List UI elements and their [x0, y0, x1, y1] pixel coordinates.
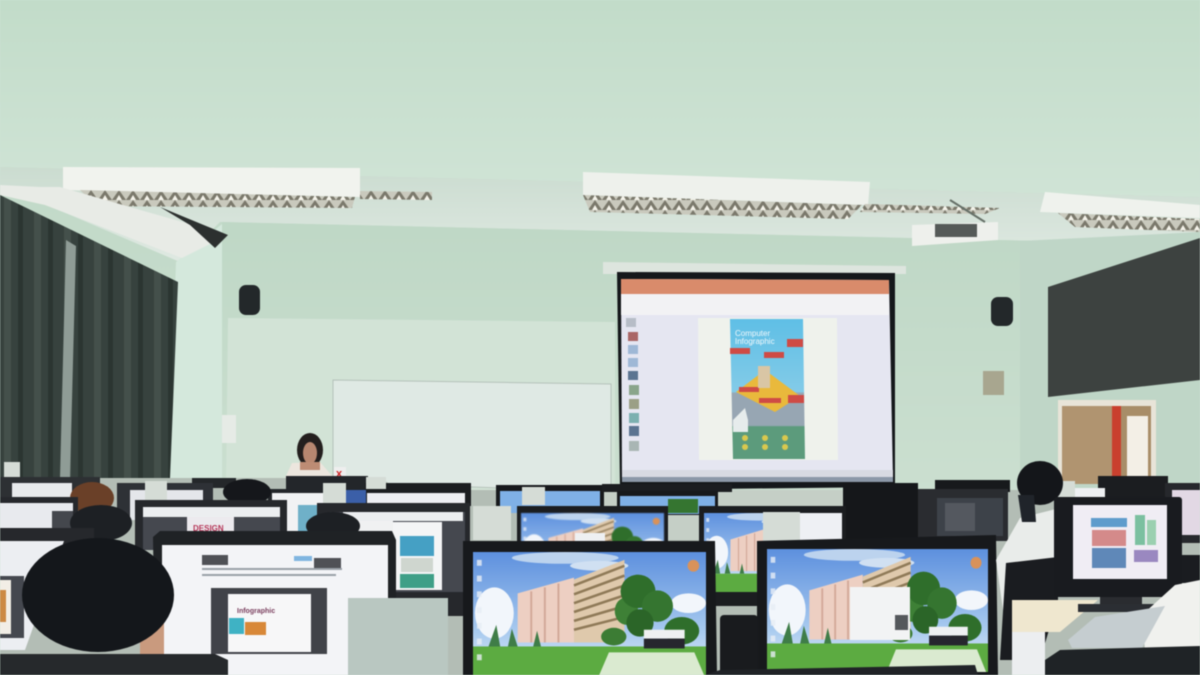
light fixture left [63, 167, 432, 208]
front monitor back left [0, 654, 228, 675]
dark wall panel right [1048, 238, 1200, 397]
infographic poster on slide: Computer [735, 329, 770, 338]
student far right: shirt [1142, 580, 1200, 650]
status bar [622, 470, 893, 477]
wall board [226, 318, 615, 490]
curtain left [0, 195, 178, 478]
desk [1012, 600, 1098, 675]
presenter: x [336, 468, 343, 480]
monitor: front left infographic page: Infographic [237, 608, 275, 615]
PC tower [720, 615, 758, 675]
chair behind monitor [1178, 555, 1200, 583]
taskbar [622, 477, 893, 482]
infographic poster on slide: Infographic [735, 337, 775, 346]
student right: head [1017, 461, 1063, 522]
speaker right [991, 297, 1013, 326]
chair right [1000, 557, 1058, 660]
monitor: front left infographic page [153, 531, 396, 675]
monitor: HP all-in-one [1054, 497, 1182, 612]
back wall [222, 222, 1040, 490]
speaker left [239, 285, 260, 315]
monitor: campus wallpaper back 1 [517, 506, 668, 587]
heads left [70, 479, 271, 514]
partition card [763, 512, 800, 541]
lower ceiling [0, 167, 1200, 262]
monitor: Design page [135, 500, 287, 550]
dialog window on wallpaper [850, 587, 910, 640]
monitor: poster page [317, 503, 470, 616]
screen housing [603, 262, 906, 274]
monitor: campus wallpaper front right [757, 535, 998, 675]
thumbnail strip [626, 318, 639, 451]
powerpoint ribbon [621, 294, 889, 315]
nameplate card [348, 598, 448, 675]
monitor: campus wallpaper back 2 [699, 506, 846, 606]
infographic poster on slide [730, 319, 805, 459]
light switch [222, 415, 236, 443]
monitor: campus wallpaper front centre [463, 541, 717, 675]
curtain highlight fold [60, 240, 76, 478]
whiteboard [333, 380, 611, 492]
wall socket box [983, 371, 1004, 395]
monitor: left second row [0, 497, 78, 531]
head: middle [306, 512, 360, 540]
presenter [285, 433, 346, 480]
head: front student [22, 538, 174, 654]
desk area backdrop [0, 478, 1200, 675]
projection screen [617, 272, 895, 490]
ceiling soffit [0, 0, 1200, 197]
projector [912, 200, 998, 246]
light fixture right [1040, 192, 1200, 232]
pillow on chair [1068, 606, 1165, 648]
monitor: left front [0, 528, 94, 650]
partition cards [4, 462, 1075, 540]
slide page [698, 318, 838, 460]
air conditioner [0, 185, 228, 258]
door [1058, 400, 1156, 484]
monitor: Design page: DESIGN [193, 524, 224, 533]
light fixture centre [583, 172, 1000, 219]
left wall column [168, 224, 222, 482]
front monitor back centre [705, 665, 978, 675]
back row monitors [0, 476, 1200, 543]
powerpoint title bar [621, 279, 889, 294]
student right: shirt [996, 508, 1062, 610]
head: dark hair [70, 505, 132, 541]
chair front right [1045, 646, 1200, 675]
right wall [1020, 232, 1200, 490]
